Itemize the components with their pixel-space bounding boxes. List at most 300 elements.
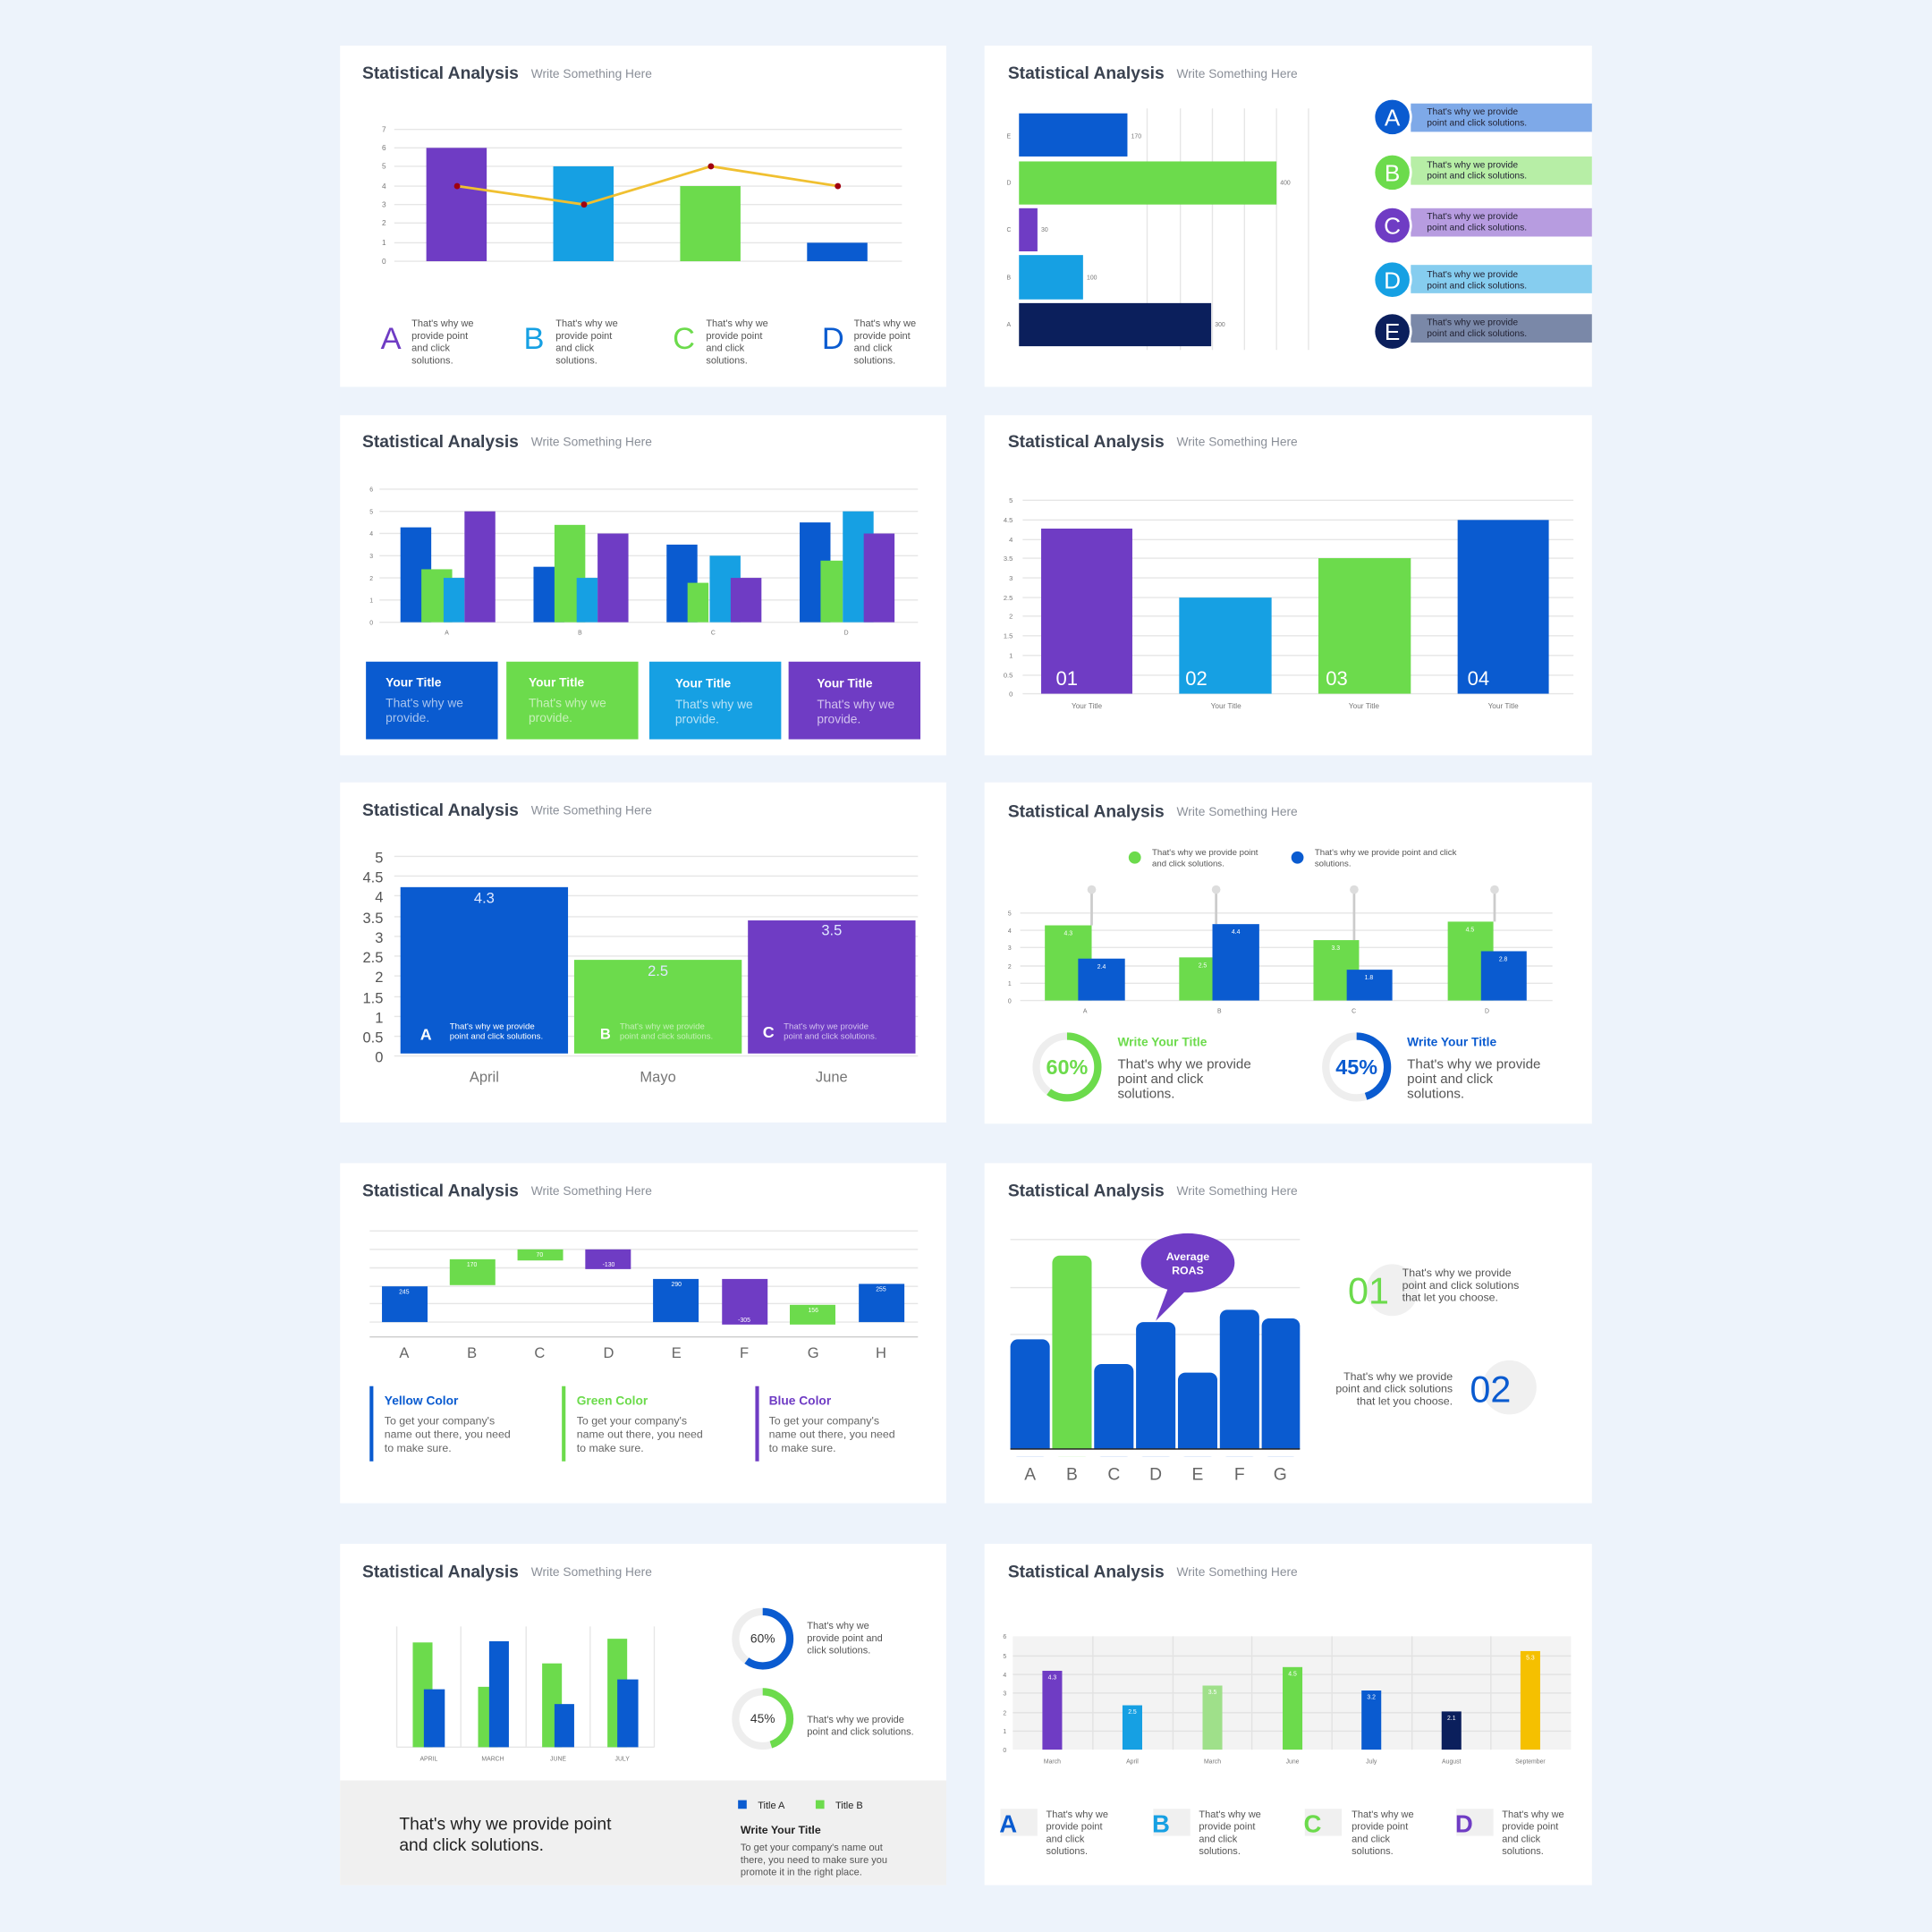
column chart [1003, 1634, 1571, 1765]
legend columns: Blue Color [769, 1394, 832, 1407]
donut 60%: Write Your Title [1117, 1036, 1208, 1049]
labelled list A-E: That's why we provide [1427, 160, 1518, 170]
heading: Write Something Here [531, 804, 652, 818]
column chart: 5 [1009, 496, 1013, 504]
heading: Write Something Here [1177, 67, 1298, 80]
rounded bar chart: F [1234, 1465, 1245, 1484]
point 01: That's why we provide [1402, 1267, 1512, 1279]
waterfall bars: 290 [672, 1282, 682, 1288]
waterfall bars: 255 [876, 1287, 886, 1293]
column chart: 2.1 [1447, 1716, 1456, 1722]
paired bar chart: 4.3 [1064, 931, 1072, 937]
legend columns: Green Color [577, 1394, 648, 1407]
horizontal bars: A [1006, 322, 1011, 328]
bar chart with line: 6 [382, 144, 386, 152]
heading: Write Something Here [1177, 436, 1298, 449]
waterfall bars: -130 [603, 1262, 615, 1268]
donut 45%: That's why we provide [807, 1715, 904, 1725]
waterfall bars: D [604, 1344, 614, 1361]
rounded bar chart [1004, 1240, 1306, 1484]
horizontal bars: 100 [1087, 275, 1097, 282]
legend: solutions. [1315, 859, 1352, 869]
grouped bar chart: 5 [369, 509, 373, 515]
column chart: 2.5 [1128, 1709, 1137, 1716]
donut 60% [735, 1612, 883, 1665]
letter notes A-D: B [1152, 1809, 1170, 1837]
panel: grouped bars with title boxes [340, 415, 946, 755]
labelled list A-E: point and click solutions. [1427, 224, 1527, 233]
waterfall bars: F [740, 1344, 749, 1361]
grouped bar chart: B [578, 630, 582, 636]
legend items A-D: provide point [854, 331, 911, 342]
donut 60%: point and click [1117, 1072, 1204, 1087]
letter notes A-D: provide point [1046, 1822, 1103, 1833]
letter notes A-D: and click [1046, 1834, 1085, 1844]
legend items A-D: solutions. [411, 355, 453, 366]
labelled list A-E: point and click solutions. [1427, 119, 1527, 129]
title boxes [366, 662, 920, 740]
heading: Statistical Analysis [362, 433, 519, 452]
donut 45%: Write Your Title [1407, 1036, 1496, 1049]
legend items A-D: That's why we [555, 318, 618, 329]
waterfall bars: -305 [738, 1318, 750, 1324]
heading: Statistical Analysis [362, 64, 519, 83]
letter notes A-D [999, 1809, 1564, 1857]
legend columns: To get your company's [385, 1414, 495, 1427]
bar chart with line: 7 [382, 125, 386, 133]
paired bar chart: 4.4 [1232, 929, 1241, 936]
column chart: 01 [1056, 667, 1078, 690]
labelled list A-E: E [1385, 318, 1400, 345]
waterfall bars: H [876, 1344, 886, 1361]
column chart: 1 [1009, 652, 1013, 660]
donut 60%: solutions. [1117, 1086, 1174, 1101]
donut 60%: 60% [750, 1631, 775, 1645]
title boxes: Your Title [675, 677, 731, 691]
bottom legend and note: Title A [758, 1801, 785, 1811]
legend items A-D: solutions. [555, 355, 597, 366]
donut 60% [1037, 1036, 1251, 1101]
title boxes: provide. [386, 711, 429, 724]
bar chart with line: 3 [382, 200, 386, 208]
column chart: 0.5 [1004, 672, 1013, 680]
column chart: 1 [375, 1009, 383, 1026]
column chart: 0.5 [362, 1029, 383, 1046]
donut 45%: solutions. [1407, 1086, 1464, 1101]
legend columns: To get your company's [769, 1414, 879, 1427]
heading: Statistical Analysis [362, 801, 519, 820]
panel: ROAS bars [985, 1163, 1592, 1504]
column chart: 03 [1326, 667, 1348, 690]
heading: Write Something Here [1177, 1184, 1298, 1198]
callout: Average ROAS: Average [1166, 1250, 1209, 1263]
legend items A-D [381, 318, 916, 366]
column chart: 3 [1003, 1691, 1006, 1698]
column chart: March [1204, 1758, 1221, 1765]
column chart: 4.5 [1288, 1671, 1297, 1677]
panel: waterfall chart [340, 1163, 946, 1504]
title boxes: That's why we [529, 697, 606, 710]
legend items A-D: and click [854, 343, 893, 354]
letter notes A-D: and click [1199, 1834, 1238, 1844]
horizontal bars: B [1006, 275, 1011, 282]
grouped bar chart: 2 [369, 576, 373, 582]
column chart: 3 [1009, 574, 1013, 582]
column chart [397, 1626, 654, 1763]
legend items A-D: and click [706, 343, 745, 354]
donut 60%: provide point and [807, 1633, 883, 1644]
rounded bar chart: D [1149, 1465, 1162, 1484]
column chart: June [1286, 1758, 1300, 1765]
waterfall bars: B [467, 1344, 477, 1361]
grouped bar chart: 3 [369, 554, 373, 560]
legend columns: To get your company's [577, 1414, 687, 1427]
column chart: 2 [1003, 1711, 1006, 1717]
letter notes A-D: C [1303, 1809, 1321, 1837]
bottom statement: and click solutions. [399, 1836, 544, 1855]
column chart: 4.5 [1004, 516, 1013, 524]
title boxes: That's why we [817, 698, 894, 711]
bar chart with line: 4 [382, 182, 386, 191]
column chart: August [1442, 1758, 1462, 1765]
heading [1008, 802, 1298, 821]
column chart: 5 [1003, 1654, 1006, 1660]
column chart: 3.5 [1004, 555, 1013, 563]
labelled list A-E: B [1385, 160, 1400, 187]
letter notes A-D: That's why we [1502, 1809, 1564, 1820]
column chart: point and click solutions. [784, 1031, 877, 1041]
horizontal bars: C [1006, 227, 1011, 233]
column chart: 0 [1009, 690, 1013, 698]
panel: paired bars with donuts [985, 783, 1592, 1123]
bottom statement: That's why we provide point [399, 1816, 612, 1835]
labelled list A-E: That's why we provide [1427, 107, 1518, 117]
title boxes: provide. [817, 713, 860, 726]
horizontal bars: E [1006, 133, 1011, 140]
column chart: That's why we provide [450, 1021, 535, 1031]
column chart: That's why we provide [620, 1021, 705, 1031]
panel: wide columns April-June [340, 783, 946, 1123]
column chart: Your Title [1349, 702, 1379, 710]
waterfall bars: 170 [467, 1262, 478, 1268]
column chart: June [816, 1068, 848, 1085]
paired bar chart: 3 [1008, 945, 1012, 952]
bottom legend and note: To get your company's name out [741, 1843, 883, 1853]
column chart: 0 [375, 1048, 383, 1065]
column chart: 4.5 [362, 869, 383, 886]
labelled list A-E: point and click solutions. [1427, 172, 1527, 182]
bar chart with line: 5 [382, 163, 386, 171]
column chart: September [1515, 1758, 1546, 1765]
panel: monthly bars with letters [985, 1544, 1592, 1885]
waterfall bars [369, 1231, 918, 1361]
column chart: That's why we provide [784, 1021, 869, 1031]
legend items A-D: That's why we [706, 318, 768, 329]
column chart: 4.3 [1048, 1675, 1056, 1682]
rounded bar chart: G [1274, 1465, 1287, 1484]
column chart: 04 [1468, 667, 1489, 690]
legend columns: Yellow Color [385, 1394, 459, 1407]
heading [362, 64, 652, 83]
heading [1008, 1563, 1298, 1581]
title boxes: That's why we [675, 698, 753, 711]
point 01: 01 [1348, 1270, 1389, 1311]
letter notes A-D: solutions. [1199, 1846, 1241, 1857]
horizontal bars [1006, 108, 1309, 350]
letter notes A-D: and click [1352, 1834, 1391, 1844]
legend items A-D: A [381, 322, 402, 356]
paired bar chart: B [1217, 1008, 1222, 1014]
paired bar chart: 2 [1008, 964, 1012, 970]
paired bar chart: 2.4 [1097, 964, 1106, 970]
legend columns: to make sure. [385, 1442, 452, 1454]
donut 45%: point and click solutions. [807, 1727, 914, 1738]
column chart: 3.2 [1367, 1695, 1376, 1701]
column chart: 2.5 [362, 949, 383, 966]
paired bar chart: 4 [1008, 928, 1012, 935]
legend columns: to make sure. [577, 1442, 644, 1454]
horizontal bars: 30 [1041, 227, 1048, 233]
grouped bar chart: A [445, 630, 449, 636]
letter notes A-D: and click [1502, 1834, 1541, 1844]
column chart: MARCH [481, 1757, 504, 1763]
waterfall bars: E [672, 1344, 682, 1361]
horizontal bars: 400 [1280, 181, 1291, 187]
heading [362, 801, 652, 820]
legend items A-D: provide point [706, 331, 762, 342]
column chart: 6 [1003, 1634, 1006, 1640]
column chart: point and click solutions. [620, 1031, 713, 1041]
heading: Write Something Here [531, 1184, 652, 1198]
point 02: point and click solutions [1335, 1383, 1453, 1395]
heading: Write Something Here [531, 67, 652, 80]
heading: Write Something Here [1177, 1565, 1298, 1579]
heading [362, 433, 652, 452]
bottom statement [399, 1816, 612, 1855]
column chart: 1.5 [1004, 632, 1013, 640]
column chart: 2 [375, 969, 383, 986]
column chart: B [600, 1025, 611, 1042]
paired bar chart: 4.5 [1466, 927, 1474, 933]
legend items A-D: solutions. [706, 355, 748, 366]
column chart: Mayo [640, 1068, 676, 1085]
legend items A-D: D [822, 322, 844, 356]
point 02: 02 [1470, 1369, 1511, 1411]
letter notes A-D: That's why we [1352, 1809, 1414, 1820]
column chart: JULY [615, 1757, 630, 1763]
column chart: 5 [375, 849, 383, 866]
waterfall bars: 156 [808, 1308, 818, 1314]
waterfall bars: 70 [537, 1252, 543, 1258]
legend columns: to make sure. [769, 1442, 836, 1454]
paired bar chart: 2.8 [1499, 956, 1508, 962]
paired bar chart: A [1083, 1008, 1088, 1014]
panel: numbered column chart [985, 415, 1592, 755]
panel: horizontal bar chart [985, 46, 1592, 387]
rounded bar chart: A [1024, 1465, 1036, 1484]
heading: Statistical Analysis [1008, 802, 1165, 821]
column chart: APRIL [419, 1757, 437, 1763]
labelled list A-E: That's why we provide [1427, 318, 1518, 328]
heading: Statistical Analysis [1008, 1563, 1165, 1581]
letter notes A-D: solutions. [1046, 1846, 1088, 1857]
legend items A-D: C [673, 322, 695, 356]
paired bar chart: 5 [1008, 911, 1012, 918]
letter notes A-D: That's why we [1199, 1809, 1261, 1820]
heading: Statistical Analysis [362, 1182, 519, 1201]
legend columns [369, 1386, 895, 1462]
column chart: Your Title [1488, 702, 1519, 710]
column chart: 2.5 [1004, 594, 1013, 602]
column chart: 2.5 [648, 962, 668, 979]
panel: month bars with donuts [340, 1544, 946, 1885]
bar chart with line: 2 [382, 219, 386, 227]
heading [1008, 64, 1298, 83]
paired bar chart: 0 [1008, 998, 1012, 1004]
column chart: 1.5 [362, 989, 383, 1006]
column chart [1004, 496, 1573, 710]
column chart: A [420, 1026, 432, 1044]
column chart: 02 [1185, 667, 1208, 690]
grouped bar chart [369, 487, 918, 636]
title boxes: provide. [529, 711, 572, 724]
horizontal bars: D [1006, 181, 1011, 187]
legend: That's why we provide point [1152, 848, 1258, 858]
heading: Statistical Analysis [1008, 1182, 1165, 1201]
column chart: Your Title [1072, 702, 1102, 710]
legend items A-D: and click [555, 343, 595, 354]
grouped bar chart: 4 [369, 531, 373, 538]
column chart: 4.3 [474, 890, 495, 907]
letter notes A-D: A [999, 1809, 1017, 1837]
grouped bar chart: D [844, 630, 849, 636]
title boxes: That's why we [386, 697, 463, 710]
labelled list A-E: A [1385, 105, 1401, 131]
point 01: that let you choose. [1402, 1292, 1498, 1304]
letter notes A-D: provide point [1199, 1822, 1255, 1833]
legend [1129, 848, 1457, 869]
heading: Write Something Here [531, 436, 652, 449]
column chart: 2 [1009, 613, 1013, 621]
heading: Statistical Analysis [1008, 64, 1165, 83]
column chart: March [1044, 1758, 1061, 1765]
legend: That's why we provide point and click [1315, 848, 1457, 858]
title boxes: Your Title [529, 675, 585, 689]
column chart: 4 [1009, 536, 1013, 544]
horizontal bars: 170 [1131, 133, 1141, 140]
column chart: JUNE [550, 1757, 566, 1763]
grouped bar chart: C [711, 630, 716, 636]
waterfall bars: C [534, 1344, 545, 1361]
labelled list A-E: point and click solutions. [1427, 281, 1527, 291]
panel: line and bar chart [340, 46, 946, 387]
column chart: 3.5 [821, 922, 842, 939]
point 02: That's why we provide [1343, 1370, 1453, 1383]
legend items A-D: and click [411, 343, 450, 354]
heading: Statistical Analysis [1008, 433, 1165, 452]
column chart: Your Title [1211, 702, 1241, 710]
column chart: 5.3 [1526, 1656, 1535, 1662]
bottom legend and note: Title B [835, 1801, 863, 1811]
letter notes A-D: solutions. [1352, 1846, 1394, 1857]
waterfall bars: A [399, 1344, 409, 1361]
paired bar chart: 1.8 [1365, 975, 1373, 981]
callout: Average ROAS: ROAS [1172, 1264, 1204, 1276]
bottom legend and note: there, you need to make sure you [741, 1855, 887, 1866]
horizontal bars: 300 [1215, 322, 1225, 328]
rounded bar chart: E [1192, 1465, 1204, 1484]
bottom legend and note [738, 1801, 887, 1878]
labelled list A-E: C [1384, 213, 1401, 240]
point 01 [1348, 1264, 1519, 1316]
labelled list A-E: point and click solutions. [1427, 329, 1527, 339]
legend columns: name out there, you need [385, 1428, 511, 1441]
donut 60%: That's why we provide [1117, 1056, 1251, 1072]
donut 60%: 60% [1046, 1055, 1089, 1079]
legend items A-D: That's why we [411, 318, 474, 329]
rounded bar chart: B [1066, 1465, 1078, 1484]
labelled list A-E: That's why we provide [1427, 270, 1518, 280]
legend: and click solutions. [1152, 859, 1224, 869]
paired bar chart: 2.5 [1199, 962, 1207, 969]
callout: Average ROAS [1141, 1233, 1234, 1321]
legend columns: name out there, you need [577, 1428, 703, 1441]
rounded bar chart: C [1107, 1465, 1120, 1484]
column chart: C [763, 1023, 775, 1041]
labelled list A-E [1374, 98, 1592, 350]
heading [362, 1563, 652, 1581]
column chart: point and click solutions. [450, 1031, 543, 1041]
donut 60%: That's why we [807, 1621, 869, 1631]
point 02: that let you choose. [1357, 1394, 1453, 1407]
grouped bar chart: 6 [369, 487, 373, 494]
letter notes A-D: D [1455, 1809, 1473, 1837]
donut 45% [735, 1691, 914, 1746]
donut 45% [1326, 1036, 1540, 1101]
point 02 [1335, 1360, 1537, 1414]
labelled list A-E: D [1384, 267, 1401, 293]
donut 45%: That's why we provide [1407, 1056, 1540, 1072]
bar chart with line: 1 [382, 239, 386, 247]
donut 45%: 45% [750, 1712, 775, 1725]
donut 45%: 45% [1335, 1055, 1377, 1079]
bar chart with line [382, 125, 902, 266]
letter notes A-D: provide point [1352, 1822, 1408, 1833]
letter notes A-D: That's why we [1046, 1809, 1108, 1820]
heading [362, 1182, 652, 1201]
column chart: 4 [375, 888, 383, 905]
paired bar chart: 3.3 [1331, 945, 1340, 952]
column chart [362, 849, 918, 1085]
bar chart with line: 0 [382, 258, 386, 266]
column chart: July [1366, 1758, 1377, 1765]
bottom legend and note: promote it in the right place. [741, 1868, 862, 1878]
grouped bar chart: 0 [369, 620, 373, 626]
title boxes: provide. [675, 713, 719, 726]
heading: Statistical Analysis [362, 1563, 519, 1581]
waterfall bars: 245 [399, 1289, 410, 1295]
title boxes: Your Title [386, 675, 442, 689]
point 01: point and click solutions [1402, 1279, 1519, 1292]
heading [1008, 1182, 1298, 1201]
column chart: 1 [1003, 1729, 1006, 1735]
column chart: April [470, 1068, 499, 1085]
heading: Write Something Here [1177, 805, 1298, 818]
grouped bar chart: 1 [369, 598, 373, 605]
legend items A-D: provide point [555, 331, 612, 342]
legend items A-D: That's why we [854, 318, 916, 329]
legend items A-D: solutions. [854, 355, 895, 366]
